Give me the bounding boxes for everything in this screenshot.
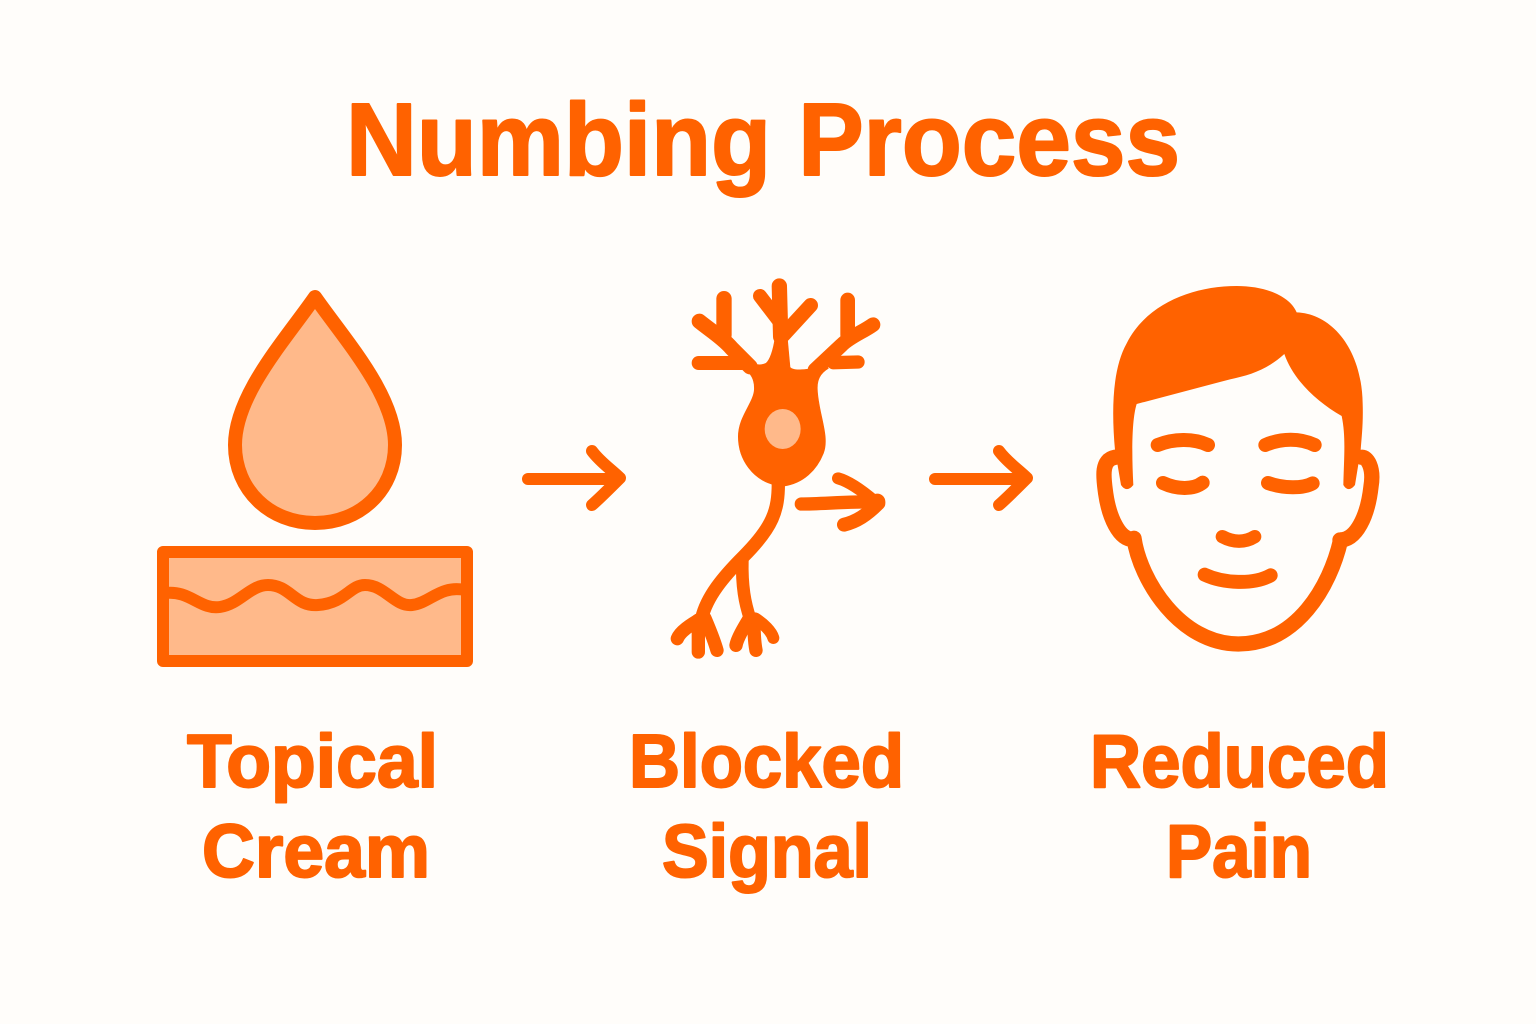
right ear (1340, 457, 1372, 540)
label: blocked signal: Signal (662, 809, 872, 893)
icon: cream drop on skin (163, 297, 467, 661)
label: topical cream: Cream (202, 809, 430, 893)
label: reduced pain (1090, 719, 1389, 893)
neuron nucleus (765, 409, 801, 449)
icon: cream drop (235, 297, 395, 523)
label: reduced pain: Pain (1166, 809, 1312, 893)
neuron axon (702, 483, 778, 618)
neuron cell body (738, 338, 828, 486)
arrow: cream to signal (528, 451, 620, 505)
hair (1113, 286, 1363, 489)
icon: neuron (677, 286, 881, 652)
title: Numbing Process (346, 82, 1180, 197)
skin wave line (165, 585, 465, 607)
face outline (1134, 538, 1341, 644)
nose (1222, 537, 1255, 541)
arrow: signal to face (935, 451, 1027, 505)
label: blocked signal (629, 719, 904, 893)
mouth (1205, 575, 1271, 582)
label: reduced pain: Reduced (1090, 719, 1389, 803)
icon: relaxed face (1104, 286, 1372, 644)
arrow: outgoing signal (801, 478, 881, 525)
label: topical cream: Topical (187, 719, 438, 803)
left ear (1104, 457, 1133, 539)
eyebrows and closed eyes (1158, 440, 1315, 488)
icon: skin block (163, 552, 467, 661)
label: topical cream (187, 719, 438, 893)
label: blocked signal: Blocked (629, 719, 904, 803)
